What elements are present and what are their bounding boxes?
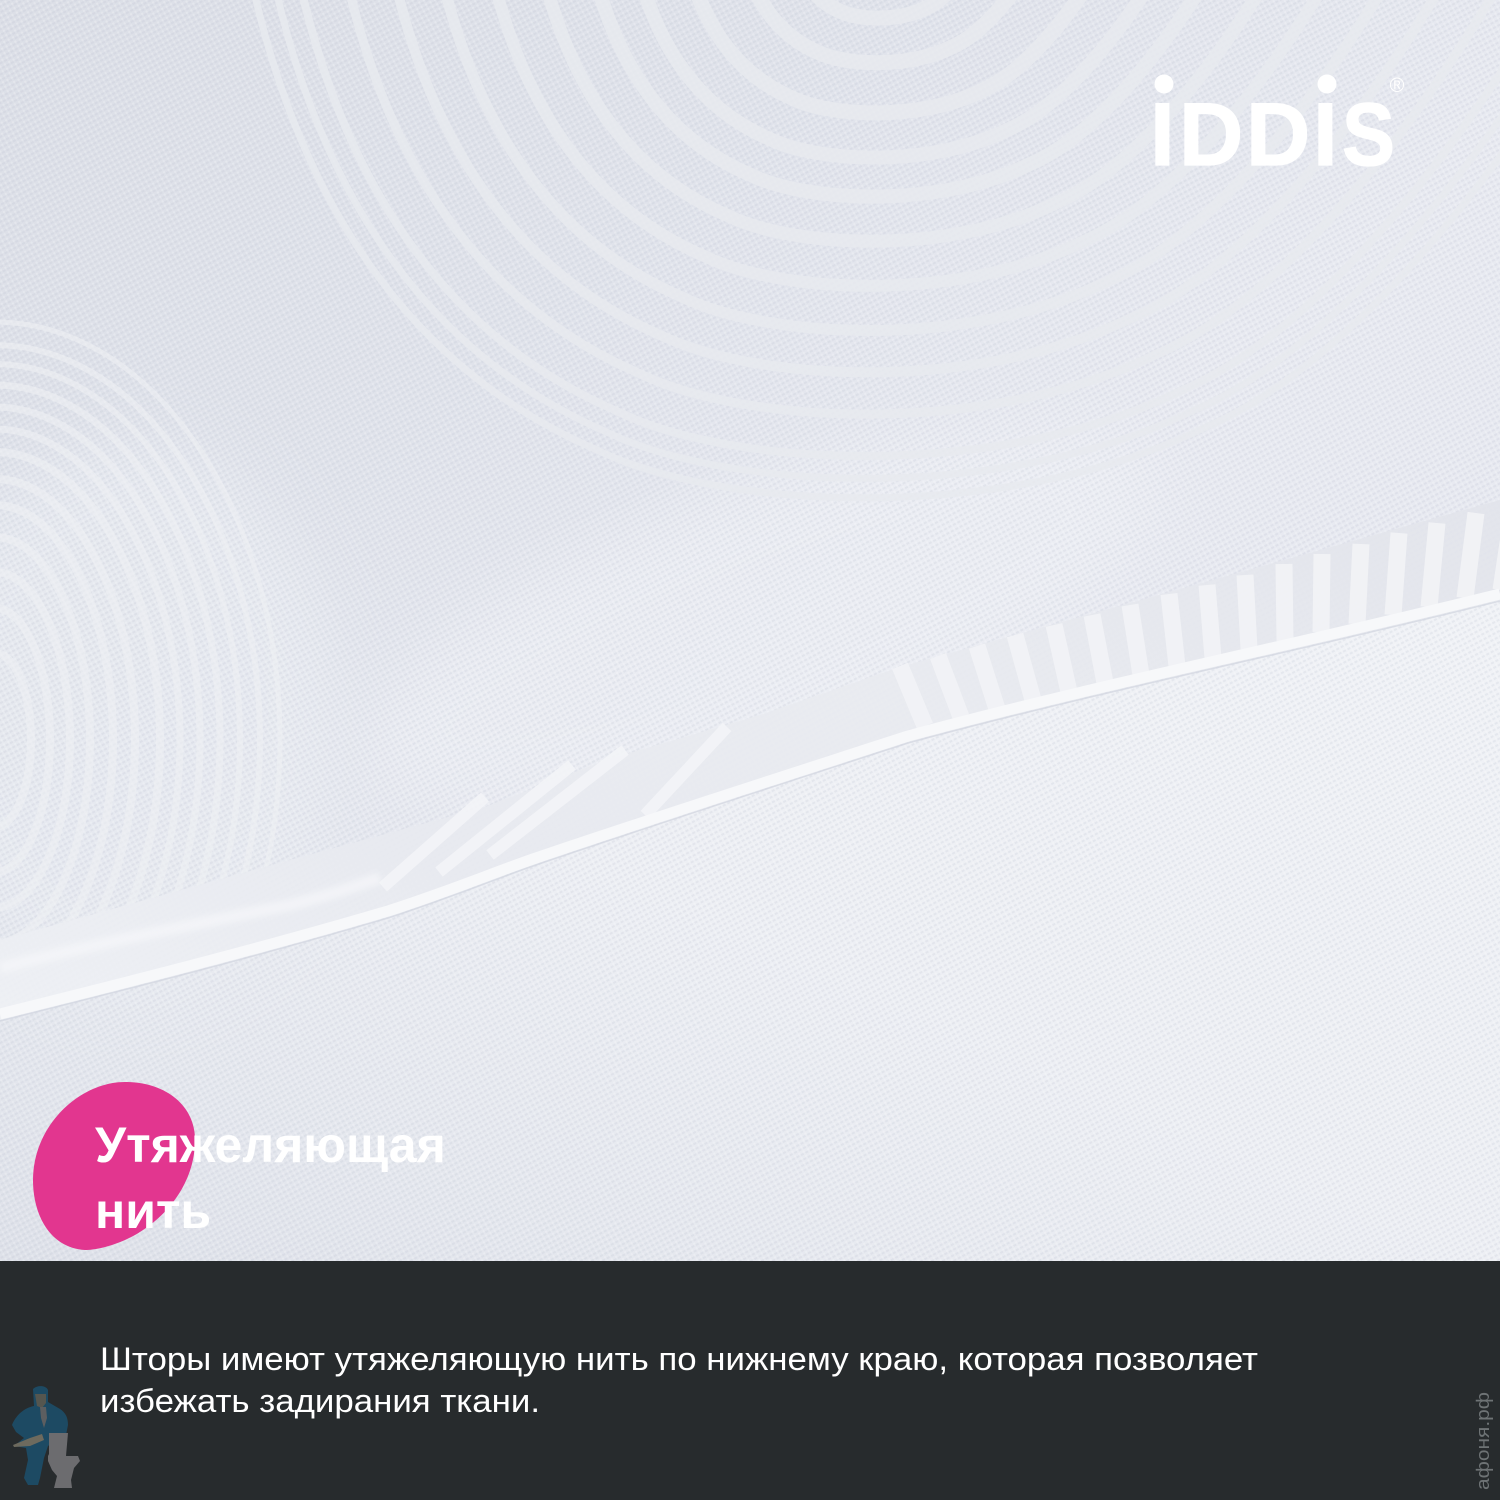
description text: избежать задирания ткани. [100,1383,540,1419]
heading: нить [95,1183,211,1239]
description text [100,1341,1258,1419]
logo: IDDIS: I [1150,84,1175,184]
logo: IDDIS [1150,74,1405,184]
heading [95,1117,446,1239]
footer panel [0,1261,1500,1500]
pattern: large concentric rings [225,0,1500,498]
logo: IDDIS: I [1313,84,1338,184]
pink blob [33,1082,195,1250]
pattern: left concentric rings [0,320,282,940]
heading: Утяжеляющая [95,1117,446,1173]
logo: IDDIS: D [1246,84,1310,184]
logo: IDDIS: ® [1390,75,1405,97]
icon: plumber with toilet [12,1386,80,1488]
description text: Шторы имеют утяжеляющую нить по нижнему краю, которая позволяет [100,1341,1258,1377]
logo: IDDIS: D [1179,84,1243,184]
hem fold with stripes [0,500,1500,1021]
watermark: афоня.рф [1473,1392,1493,1490]
logo: IDDIS: S [1342,84,1395,184]
